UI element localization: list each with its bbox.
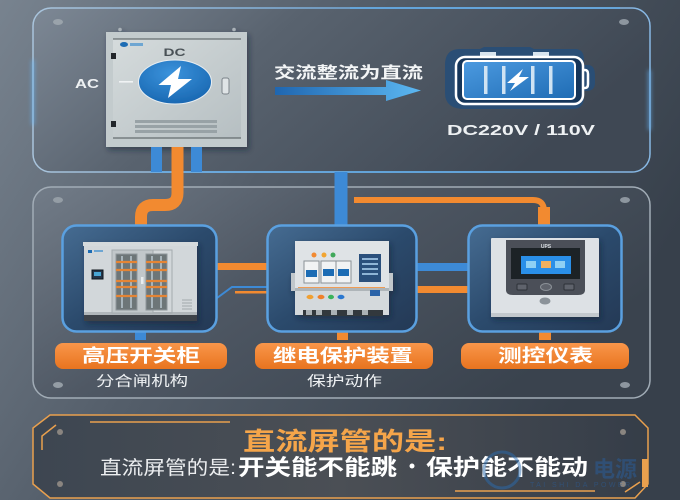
panel: devices	[33, 187, 650, 398]
text: summary line: 保护能不能动	[426, 455, 588, 480]
icon: relay device	[291, 241, 393, 316]
label: measurement meter: 测控仪表	[498, 345, 593, 366]
label: relay protection device: 继电保护装置	[273, 345, 413, 366]
icon: meter	[491, 238, 599, 317]
heading: rectification text: 交流整流为直流	[274, 63, 423, 82]
heading: summary title: 直流屏管的是:	[243, 428, 447, 456]
label: voltage: DC220V / 110V	[447, 122, 595, 139]
panel: summary callout	[33, 415, 648, 498]
card: high-voltage switchgear	[62, 226, 216, 332]
card: measurement and control meter	[468, 226, 622, 332]
icon: DC cabinet: DC	[164, 47, 186, 59]
watermark: TAI SHI DA POWER	[530, 482, 630, 489]
label: high-voltage switchgear: 高压开关柜	[82, 345, 200, 366]
label: high-voltage switchgear	[55, 343, 227, 369]
text: summary line: 直流屏管的是:	[100, 457, 236, 479]
caption: opening and closing mechanism: 分合闸机构	[96, 373, 188, 389]
watermark: 电源	[593, 457, 637, 482]
icon: switchgear cabinet	[83, 242, 198, 321]
caption: protection action: 保护动作	[307, 373, 382, 389]
text: summary line: 开关能不能跳	[238, 455, 397, 480]
connectors: power lines	[135, 147, 551, 340]
watermark	[484, 452, 637, 489]
icon: DC cabinet	[106, 28, 247, 147]
text: summary line	[100, 455, 588, 480]
arrow: AC to DC	[275, 80, 421, 101]
label: AC: AC	[75, 76, 100, 91]
icon: meter: UPS	[541, 244, 552, 250]
icon: battery	[445, 47, 595, 109]
label: measurement meter	[461, 343, 629, 369]
label: relay protection device	[255, 343, 433, 369]
card: relay protection	[268, 226, 416, 332]
panel: AC to DC rectification	[33, 8, 650, 172]
